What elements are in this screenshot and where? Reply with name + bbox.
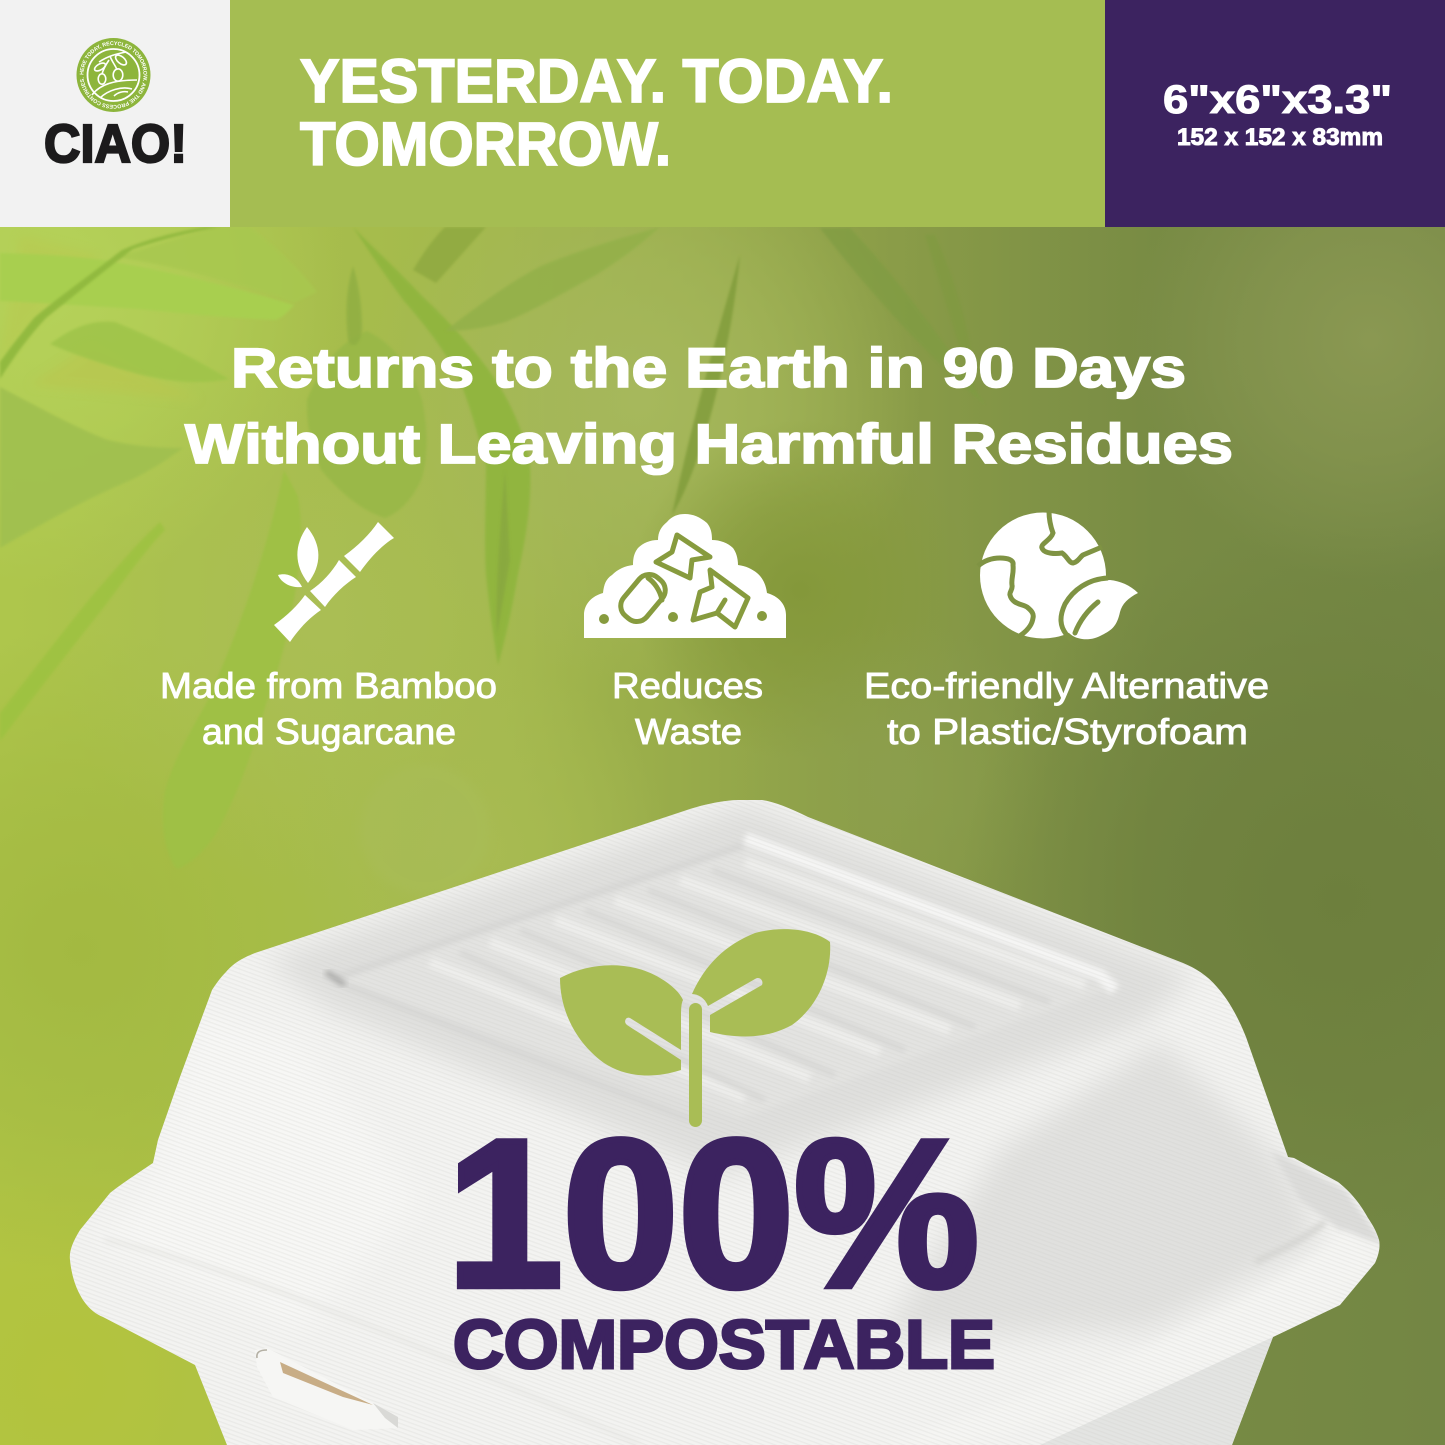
dimensions: 6"x6"x3.3" (1163, 78, 1392, 122)
lid shading (100, 805, 1385, 1445)
slogan: TOMORROW. (300, 110, 671, 178)
feature label: waste: Reduces (612, 665, 763, 706)
big stat: compostable: COMPOSTABLE (453, 1306, 995, 1383)
logo wordmark: CIAO! (44, 114, 187, 174)
lid recess (326, 838, 1115, 1120)
food container (60, 790, 1390, 1445)
feature label: eco-friendly (864, 665, 1269, 752)
feature label: eco-friendly: to Plastic/Styrofoam (887, 711, 1248, 752)
dimensions: 152 x 152 x 83mm (1177, 124, 1383, 151)
icon: bamboo (274, 522, 394, 642)
icon: sprout (560, 929, 830, 1127)
dimensions (1163, 78, 1392, 151)
logo badge: HERE TODAY, RECYCLED TOMORROW. AND THE PROCESS CONTINUES. (80, 41, 148, 109)
logo (44, 38, 187, 174)
feature label: eco-friendly: Eco-friendly Alternative (864, 665, 1269, 706)
slogan (300, 47, 893, 178)
feature label: bamboo: and Sugarcane (202, 711, 456, 752)
headline: Without Leaving Harmful Residues (185, 412, 1233, 475)
headline (185, 336, 1233, 475)
panel: logo background (0, 0, 230, 227)
feature label: waste (612, 665, 763, 752)
icon: earth with leaf (978, 511, 1138, 640)
slogan: YESTERDAY. TODAY. (300, 47, 893, 115)
panel: slogan band (230, 0, 1105, 227)
feature label: bamboo (160, 665, 497, 752)
lid rim fold (105, 1240, 640, 1445)
feature label: waste: Waste (635, 711, 742, 752)
headline: Returns to the Earth in 90 Days (231, 336, 1186, 399)
icon: compost pile (584, 514, 786, 638)
blurred bamboo leaves (0, 227, 985, 895)
container latch (255, 1348, 398, 1430)
panel: dimensions band (1105, 0, 1445, 227)
feature label: bamboo: Made from Bamboo (160, 665, 497, 706)
big stat: 100%: 100% (447, 1096, 979, 1331)
